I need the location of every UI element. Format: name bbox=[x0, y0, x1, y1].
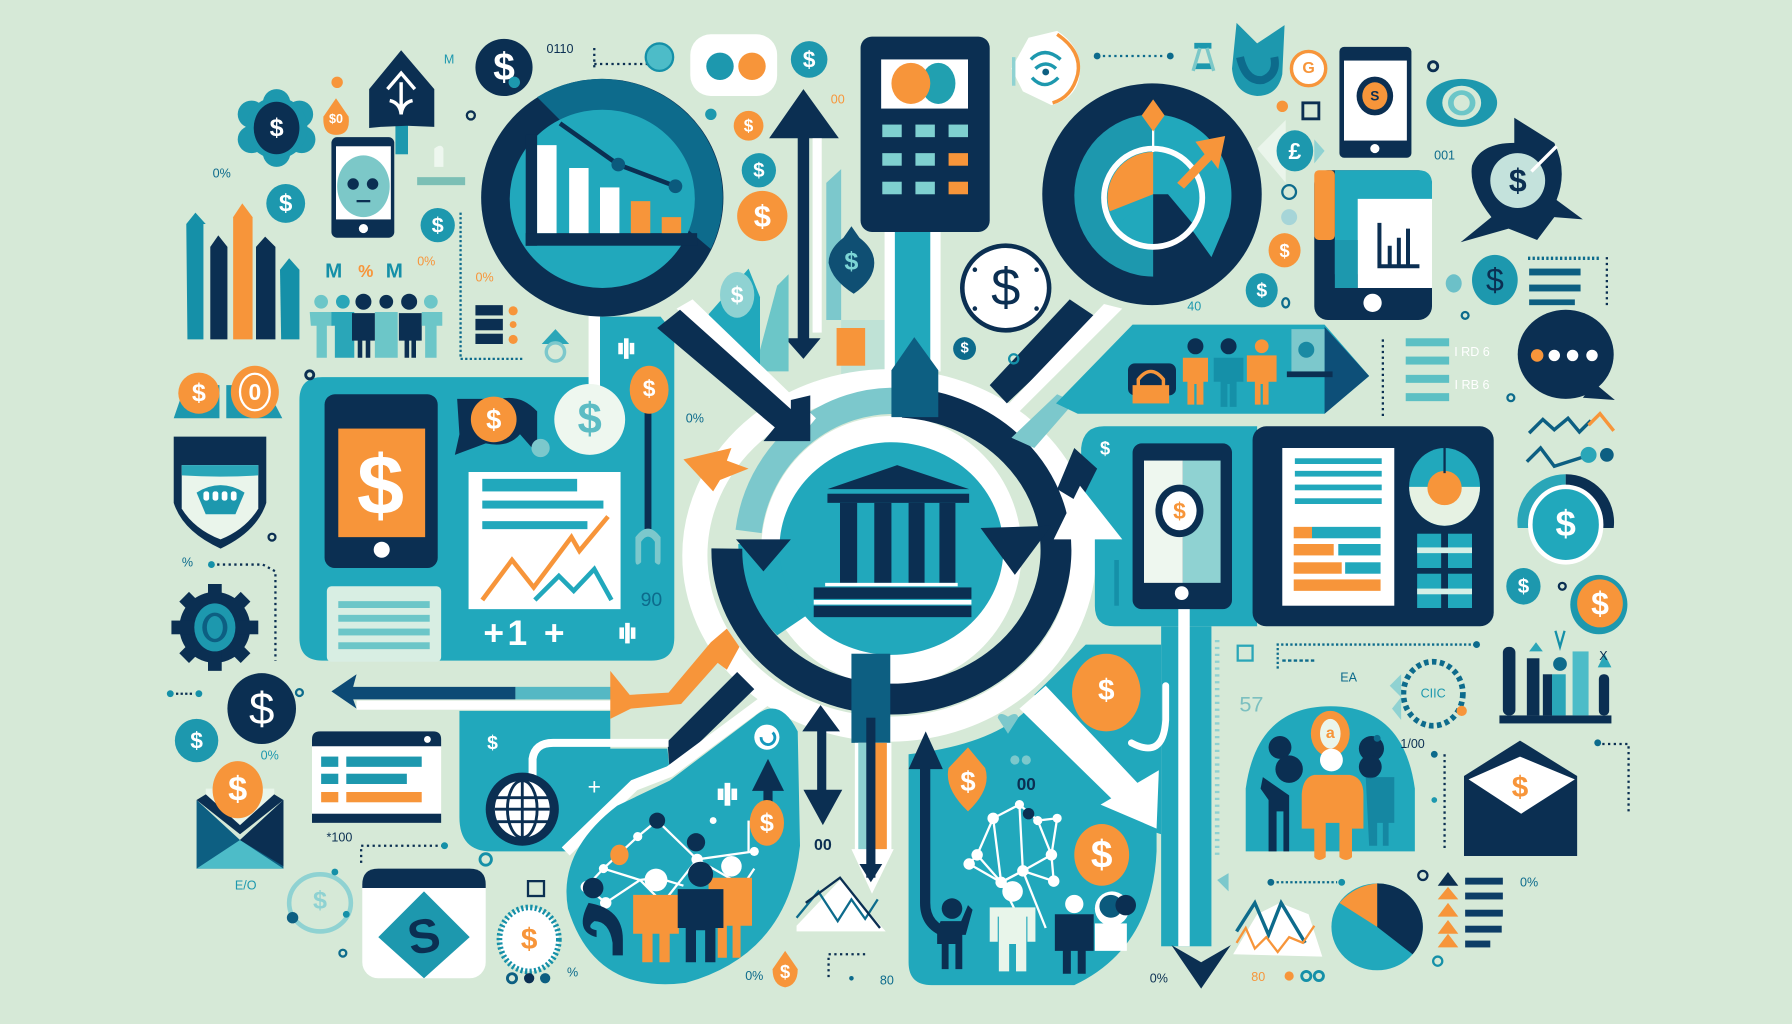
shield bbox=[174, 437, 266, 549]
person navy pointing bbox=[937, 898, 973, 969]
bottom labels: 80 bbox=[1251, 970, 1265, 984]
pie chart bbox=[1331, 883, 1423, 970]
dotted bracket top of envelope bbox=[1374, 735, 1445, 851]
calculator bbox=[861, 37, 990, 371]
dotted upper mid bbox=[1238, 641, 1480, 716]
small ring bbox=[339, 950, 346, 957]
envelope with coin bbox=[197, 761, 283, 869]
plus glyph: + bbox=[588, 773, 601, 799]
bottom labels: 0% bbox=[1150, 971, 1168, 985]
person bbox=[1247, 339, 1277, 405]
phone: $ bbox=[1173, 498, 1186, 524]
hook line bbox=[1131, 686, 1166, 748]
white ring arrowhead bbox=[1054, 486, 1122, 539]
coins on trays bbox=[174, 366, 282, 418]
head and pedestal bbox=[1095, 891, 1136, 951]
bottom bracket label bbox=[829, 954, 894, 988]
teal coin 4: 40 bbox=[1187, 299, 1201, 313]
teal pound coin bbox=[1257, 120, 1325, 183]
small up house bbox=[542, 329, 569, 361]
bar chart right bbox=[1499, 631, 1611, 723]
orange drop coin bbox=[948, 747, 987, 811]
dotted bracket low bbox=[361, 842, 448, 863]
percent right: 0% bbox=[1520, 875, 1538, 889]
stacked triangles and bars bbox=[1418, 871, 1503, 966]
database stack bbox=[475, 305, 518, 344]
inner white fill bbox=[761, 416, 1022, 686]
dotted upper mid: EA bbox=[1340, 671, 1358, 685]
teal lower left patch bbox=[738, 544, 834, 635]
dotted ruler bbox=[1215, 640, 1219, 857]
teal coin: $ bbox=[753, 159, 765, 182]
teal coin bbox=[742, 153, 776, 187]
dollar glyph: $ bbox=[487, 732, 498, 754]
right dashboard panel bbox=[1057, 426, 1494, 626]
top right phone bbox=[1339, 47, 1411, 158]
teal and orange coins right bbox=[1506, 568, 1566, 605]
large magnifier with pie chart bbox=[1042, 83, 1262, 305]
speech bubble coin: $ bbox=[486, 404, 501, 435]
clock coin: $ bbox=[991, 258, 1020, 317]
percent marks: 0% bbox=[475, 271, 494, 285]
teal coin 4: $ bbox=[1256, 279, 1267, 301]
up arrow bbox=[909, 731, 951, 937]
vertical pin with coin: $ bbox=[643, 376, 656, 402]
bottom bracket label: 80 bbox=[880, 974, 894, 988]
orange coin: $ bbox=[744, 116, 754, 136]
light arc bbox=[749, 401, 903, 531]
teal drop coin: $ bbox=[731, 282, 744, 308]
label 100: *100 bbox=[326, 831, 352, 845]
list beside banner: I RB 6 bbox=[1455, 378, 1489, 392]
vertical pin with coin bbox=[630, 366, 669, 565]
person navy seated bbox=[583, 878, 623, 955]
coin and list right bbox=[1446, 255, 1607, 319]
orange drop with glyphs bbox=[323, 77, 349, 135]
teal coin second bbox=[421, 208, 455, 242]
plus one plus label: +1 + bbox=[483, 613, 568, 653]
teal coin lower bbox=[175, 719, 218, 762]
ring coin right bbox=[1517, 474, 1614, 562]
teal small coins right: $ bbox=[1279, 240, 1290, 261]
person white bbox=[990, 881, 1035, 971]
chat bubble bbox=[1507, 310, 1615, 401]
orange coin large: $ bbox=[754, 198, 771, 233]
keypad bbox=[882, 125, 968, 194]
report bbox=[1282, 448, 1394, 606]
bow and percent row: M bbox=[325, 259, 342, 282]
coin navy top: $ bbox=[493, 46, 515, 89]
gear arrow coin bbox=[1461, 118, 1583, 242]
right magnifier handle bbox=[990, 299, 1122, 448]
orange coin bbox=[1072, 654, 1141, 731]
top right dots and wifi card bbox=[1011, 31, 1080, 105]
long down arrow bbox=[1161, 609, 1231, 989]
list beside banner: I RD 6 bbox=[1454, 345, 1490, 359]
coins on trays: $ bbox=[192, 379, 206, 407]
panel: left dashboard bbox=[299, 317, 674, 662]
bars bbox=[537, 145, 681, 233]
outer white ring bbox=[695, 382, 1083, 729]
up-down arrow upper bbox=[769, 89, 839, 359]
orange coin ring: $ bbox=[1591, 585, 1609, 621]
up-down arrow lower bbox=[802, 705, 842, 825]
recycle ring: $ bbox=[313, 887, 327, 915]
dotted upper mid: 57 bbox=[1239, 692, 1263, 716]
drop coin navy: $ bbox=[844, 248, 858, 276]
ring mark bbox=[306, 371, 314, 379]
document lines card bbox=[327, 586, 441, 662]
phone with dollar bbox=[325, 394, 438, 568]
diagonal arrow: left magnifier to hub bbox=[657, 299, 816, 441]
teal coin second: $ bbox=[432, 213, 444, 238]
small ring teal bbox=[480, 854, 491, 865]
person navy front bbox=[678, 862, 723, 962]
coin navy top bbox=[475, 39, 533, 96]
teal coin lower: $ bbox=[190, 728, 203, 754]
orange drop with glyphs: $0 bbox=[329, 112, 343, 126]
three dots bbox=[507, 973, 550, 983]
dotted bracket bbox=[208, 561, 275, 661]
report with line chart bbox=[469, 472, 621, 609]
dotted bracket top of envelope: 1/00 bbox=[1400, 737, 1425, 751]
bar chart right: X bbox=[1599, 649, 1608, 663]
percent label: 0% bbox=[745, 969, 763, 983]
drop coin navy bbox=[829, 226, 874, 294]
top house arrow bbox=[891, 337, 938, 417]
teal coin left bbox=[266, 184, 305, 223]
label 0110: 0110 bbox=[546, 42, 574, 56]
orange coin ring bbox=[1570, 575, 1627, 634]
ring text dial: CIIC bbox=[1421, 687, 1446, 701]
label 00: 00 bbox=[814, 837, 832, 854]
ring text dial bbox=[1390, 662, 1467, 726]
white arrow bbox=[1019, 686, 1159, 829]
flower badge coin: $ bbox=[270, 114, 284, 142]
envelope right bbox=[1464, 741, 1577, 856]
gear bbox=[171, 584, 258, 671]
envelope with coin: $ bbox=[228, 771, 247, 809]
gear arrow coin: $ bbox=[1509, 163, 1527, 199]
left arrow row bbox=[331, 674, 613, 710]
orange bent arrow bbox=[610, 629, 739, 719]
mini bars upper bbox=[618, 338, 634, 359]
person bbox=[1183, 338, 1208, 405]
panel: people network blob bbox=[566, 699, 800, 984]
grid bbox=[1417, 534, 1472, 608]
list beside banner bbox=[1383, 338, 1490, 417]
teal coin 4 bbox=[1187, 273, 1289, 313]
small ring icon bbox=[754, 725, 779, 750]
navy diagonal arrow bbox=[667, 672, 754, 771]
phone bbox=[1133, 443, 1232, 609]
orange coin bbox=[734, 111, 763, 141]
dollar coin orange bbox=[1074, 824, 1129, 886]
ring arrowheads bbox=[736, 526, 1051, 575]
inner dial bbox=[1104, 149, 1202, 247]
network bbox=[969, 805, 1057, 928]
panel: people network blob: $ bbox=[760, 809, 774, 837]
person bbox=[1214, 338, 1243, 407]
magnifier stem with coin bbox=[554, 309, 625, 455]
phone with dollar: $ bbox=[357, 437, 404, 532]
orange star arrow bbox=[683, 448, 749, 491]
house icon bbox=[369, 50, 434, 154]
magnifier stem with coin: $ bbox=[578, 395, 602, 443]
right dashboard panel: $ bbox=[1100, 438, 1110, 458]
orange coin large bbox=[737, 191, 787, 241]
small teal coin bbox=[953, 337, 1018, 363]
ring coin right: $ bbox=[1556, 503, 1576, 544]
drop coin bottom: $ bbox=[780, 961, 790, 982]
bottom labels bbox=[1150, 970, 1323, 985]
teal coin left: $ bbox=[279, 190, 293, 217]
label: E/O bbox=[235, 879, 257, 893]
number label 90: 90 bbox=[641, 589, 662, 611]
network bbox=[586, 821, 754, 903]
teal drop coin bbox=[720, 272, 754, 318]
central hub with bank bbox=[695, 337, 1083, 729]
small marks left bbox=[182, 534, 275, 569]
coin and list right: $ bbox=[1486, 262, 1504, 298]
panel: lower left with globe bbox=[459, 672, 754, 851]
small coin row: $ bbox=[803, 46, 816, 72]
tiny box bbox=[528, 881, 544, 896]
left arrow bars bbox=[186, 203, 299, 339]
large magnifier with bar chart bbox=[481, 79, 723, 317]
bank building bbox=[814, 465, 971, 617]
top right phone: S bbox=[1370, 88, 1379, 103]
orange badge bbox=[1311, 711, 1350, 757]
trend line bbox=[560, 123, 682, 193]
navy ring bbox=[727, 402, 1056, 699]
phone face bbox=[331, 137, 394, 238]
small marks top left: 0% bbox=[213, 167, 231, 181]
browser card bbox=[312, 731, 441, 823]
drop coin bottom bbox=[773, 951, 798, 987]
person navy bbox=[1055, 895, 1094, 974]
stepped shapes beside arrow bbox=[709, 169, 889, 384]
people dome bbox=[1246, 706, 1415, 860]
small teal coin: $ bbox=[960, 341, 969, 357]
teal and orange coins right: $ bbox=[1518, 575, 1530, 598]
mountain chart small bbox=[797, 878, 886, 931]
speech bubble coin bbox=[455, 397, 550, 457]
clock coin bbox=[962, 246, 1049, 330]
banner arrow with people bbox=[1056, 325, 1369, 414]
mini bars bbox=[718, 783, 737, 806]
orange coin: $ bbox=[1098, 674, 1115, 707]
orange drop coin: $ bbox=[960, 766, 976, 797]
mini bars bbox=[619, 623, 635, 643]
small marks top left: 00 bbox=[831, 92, 845, 106]
inner disk bbox=[779, 442, 1003, 655]
up arrow and coin bbox=[752, 759, 784, 829]
small orange ring coin bbox=[1291, 51, 1326, 86]
envelope right: $ bbox=[1512, 771, 1529, 804]
dotted right of envelope bbox=[1594, 739, 1629, 814]
small coin row bbox=[791, 41, 827, 78]
bottom stem arrow from hub bbox=[851, 654, 894, 894]
white pill bbox=[690, 34, 777, 96]
bow and percent row: M bbox=[386, 259, 403, 282]
coins on trays: 0 bbox=[248, 379, 261, 405]
bow and percent row: 0% bbox=[417, 255, 435, 269]
diamond card bbox=[362, 869, 486, 978]
sunburst coin: $ bbox=[521, 923, 538, 956]
dotted line top bbox=[1094, 53, 1174, 59]
teal small coins right bbox=[1269, 185, 1301, 267]
panel: lower middle network bbox=[909, 645, 1166, 985]
wave lines bbox=[1527, 414, 1614, 466]
white connector bbox=[533, 743, 669, 777]
flower badge coin bbox=[238, 89, 315, 167]
people row bbox=[310, 294, 442, 358]
small orange ring coin: G bbox=[1302, 60, 1315, 77]
dotted row lower bbox=[1217, 873, 1345, 891]
sunburst coin bbox=[499, 907, 559, 971]
bookmark bar icon bbox=[417, 146, 465, 185]
orange badge: a bbox=[1326, 725, 1335, 742]
lock bbox=[1128, 363, 1176, 403]
dotted connector and circle bbox=[594, 43, 673, 71]
dots and label: 00 bbox=[1017, 774, 1036, 794]
tablet chart bbox=[1314, 170, 1432, 320]
dotted vertical bbox=[461, 213, 523, 359]
diamond card: S bbox=[404, 908, 444, 966]
label 001: 001 bbox=[1434, 148, 1455, 162]
bow and percent row bbox=[325, 255, 435, 282]
recycle ring bbox=[287, 869, 351, 931]
teal horn shield bbox=[1232, 23, 1285, 96]
eye sunburst bbox=[1426, 79, 1497, 127]
small marks left: % bbox=[182, 555, 193, 569]
bracket glyph bbox=[1193, 46, 1214, 71]
dots and label bbox=[1010, 755, 1036, 794]
globe bbox=[486, 773, 559, 846]
percent mark: 0% bbox=[686, 411, 704, 425]
person orange back bbox=[709, 856, 752, 958]
ring marks bbox=[1277, 62, 1438, 119]
teal pound coin: £ bbox=[1288, 138, 1301, 164]
navy coin bbox=[227, 673, 296, 744]
bow and percent row: % bbox=[358, 261, 373, 281]
dotted start bbox=[167, 689, 303, 697]
heart bbox=[998, 714, 1018, 734]
percent bottom: % bbox=[567, 966, 578, 980]
person orange bbox=[633, 869, 679, 962]
mountain chart right bbox=[1233, 903, 1322, 957]
donut bbox=[1409, 448, 1480, 526]
navy coin: $ bbox=[249, 683, 274, 734]
percent low: 0% bbox=[261, 748, 279, 762]
small marks top left: M bbox=[444, 52, 454, 66]
small marks top left bbox=[213, 52, 845, 181]
dollar coin orange: $ bbox=[1091, 833, 1113, 876]
